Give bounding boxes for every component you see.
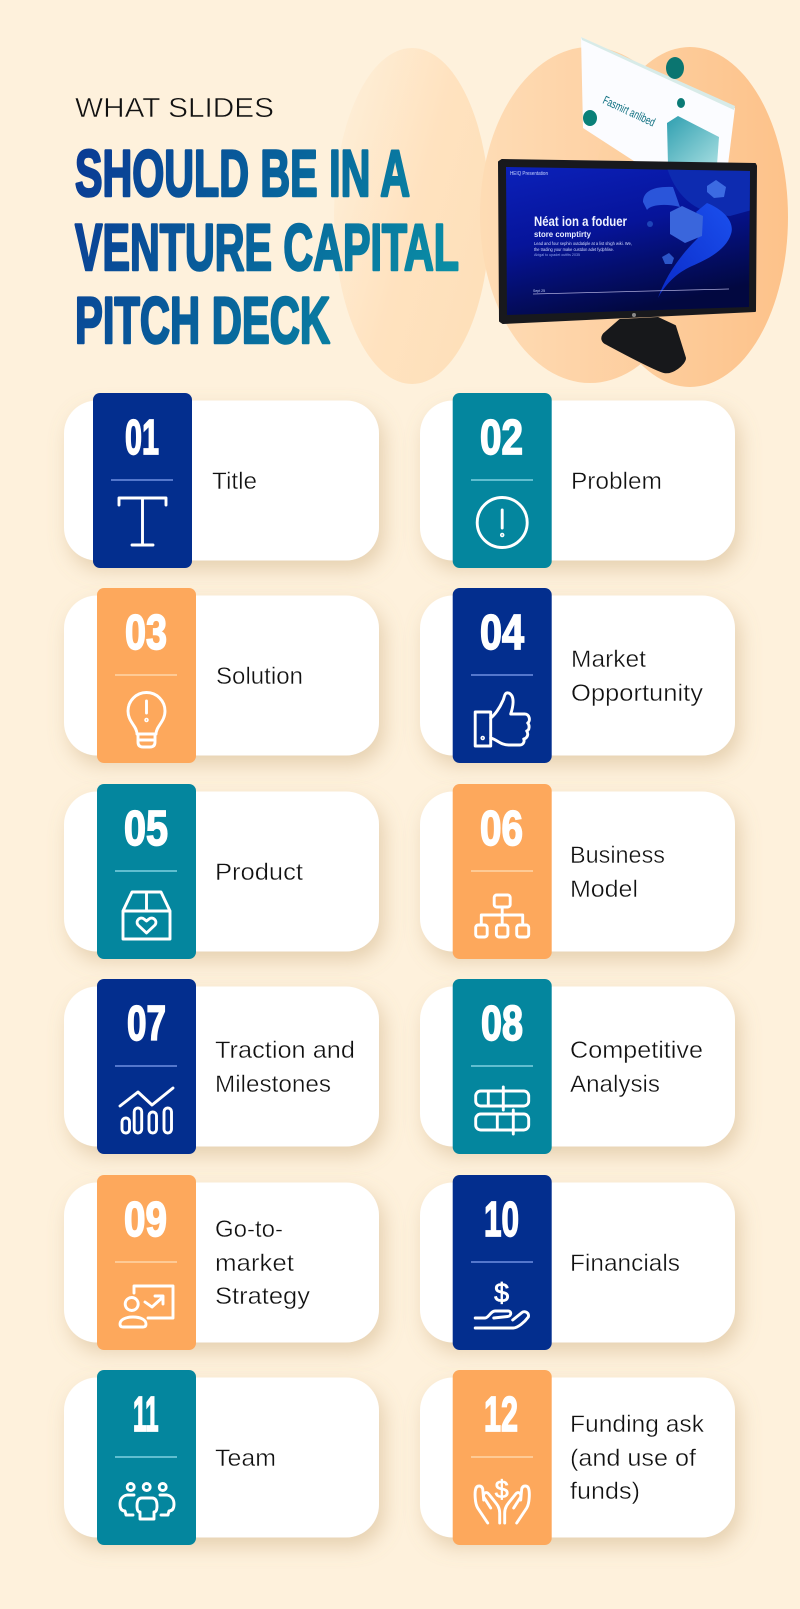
label: Market (571, 646, 646, 673)
tab 10 (453, 1175, 552, 1350)
card 07: Traction and Milestones (64, 979, 379, 1154)
card 04: Market Opportunity: 04 (480, 606, 524, 660)
card 10: Financials: 10 (484, 1193, 519, 1247)
tab 08 (453, 979, 552, 1154)
card 06: Business Model (420, 784, 735, 959)
card 12: Funding ask: (and use of (570, 1445, 696, 1472)
hero illustration: floating slide and monitor (499, 37, 756, 372)
icon: dollar over open hand: $ (494, 1278, 509, 1308)
title: venture capital: VENTURE CAPITAL (75, 210, 459, 284)
card 12: Funding ask: 12 (484, 1388, 518, 1442)
label: Problem (571, 468, 662, 495)
card 09: Go-to-market Strategy: 09 (124, 1193, 167, 1247)
card 04: Market Opportunity (420, 588, 735, 763)
label: Traction and (215, 1037, 355, 1064)
decorative peach blobs (334, 47, 788, 387)
title: pitch deck: PITCH DECK (75, 283, 330, 357)
screen text: Lead and four sephin outdatiple at a list shigh wiki. We, (534, 241, 632, 246)
icon: hands with dollar: $ (495, 1476, 509, 1504)
card 06: Business Model: Model (570, 876, 638, 903)
card 01: Title (64, 393, 379, 568)
screen text (510, 171, 632, 293)
icon: light bulb (128, 692, 165, 747)
card 02: Problem (420, 393, 735, 568)
card 11: Team: 11 (133, 1388, 158, 1442)
floating white slide: Fasmirt anlibed (601, 93, 657, 129)
tab 03 (97, 588, 196, 763)
card 07: Traction and Milestones: Milestones (215, 1071, 331, 1098)
icon: thumbs up (475, 693, 529, 746)
floating white slide (581, 37, 735, 165)
card 09: Go-to-market Strategy: Strategy (215, 1283, 310, 1310)
icon: box with heart (123, 892, 170, 939)
label: Title (212, 468, 257, 495)
card 06: Business Model: 06 (480, 802, 523, 856)
card 03: Solution: 03 (125, 606, 167, 660)
icon: growth chart (120, 1088, 173, 1133)
card 08: Competitive Analysis: 08 (481, 997, 523, 1051)
tab 06 (453, 784, 552, 959)
tab 11 (97, 1370, 196, 1545)
icon: dollar over open hand (475, 1278, 529, 1328)
tab 12 (453, 1370, 552, 1545)
tab 05 (97, 784, 196, 959)
tab 09 (97, 1175, 196, 1350)
card 09: Go-to-market Strategy (64, 1175, 379, 1350)
title: should be in a: SHOULD BE IN A (75, 136, 410, 210)
icon: comparison bars (476, 1087, 529, 1134)
screen text: Néat ion a foduer (534, 213, 627, 229)
card 01: Title: 01 (125, 411, 159, 465)
label: Team (215, 1445, 276, 1472)
card 12: Funding ask: funds) (570, 1478, 640, 1505)
screen text: HEIQ Presentation (510, 171, 548, 177)
card 12: Funding ask (420, 1370, 735, 1545)
screen text: store comptirty (534, 229, 591, 239)
card 02: Problem: 02 (480, 411, 523, 465)
label: Solution (216, 663, 303, 690)
icon: letter T (119, 498, 166, 545)
monitor screen (506, 167, 750, 315)
card 04: Market Opportunity: Opportunity (571, 680, 703, 707)
title block (75, 92, 459, 357)
icon: org chart (476, 895, 529, 937)
card 09: Go-to-market Strategy: market (215, 1250, 294, 1277)
icon: exclamation circle (477, 498, 527, 548)
monitor logo (632, 313, 636, 317)
screen text: the trading your make custdon adet fydphlise. (534, 247, 614, 252)
card 08: Competitive Analysis (420, 979, 735, 1154)
icon: hands with dollar (475, 1476, 529, 1523)
tab 04 (453, 588, 552, 763)
icon: presenter with chart (120, 1286, 173, 1327)
screen text: Sept 25 (533, 289, 545, 293)
label: Product (215, 859, 303, 886)
label: Business (570, 842, 665, 869)
label: Funding ask (570, 1411, 705, 1438)
tab 07 (97, 979, 196, 1154)
screen text: Abigal to upadet outfits 2035 (534, 253, 580, 257)
card 07: Traction and Milestones: 07 (127, 997, 166, 1051)
icon: team of three (120, 1484, 174, 1519)
label: Go-to- (215, 1216, 283, 1243)
tab 01 (93, 393, 192, 568)
monitor stand (602, 318, 685, 372)
card 05: Product: 05 (124, 802, 168, 856)
card 10: Financials (420, 1175, 735, 1350)
label: Competitive (570, 1037, 703, 1064)
card 05: Product (64, 784, 379, 959)
label: Financials (570, 1250, 680, 1277)
title: what slides: WHAT SLIDES (75, 92, 274, 123)
card 08: Competitive Analysis: Analysis (570, 1071, 660, 1098)
card 03: Solution (64, 588, 379, 763)
card 11: Team (64, 1370, 379, 1545)
monitor frame (499, 160, 756, 323)
tab 02 (453, 393, 552, 568)
